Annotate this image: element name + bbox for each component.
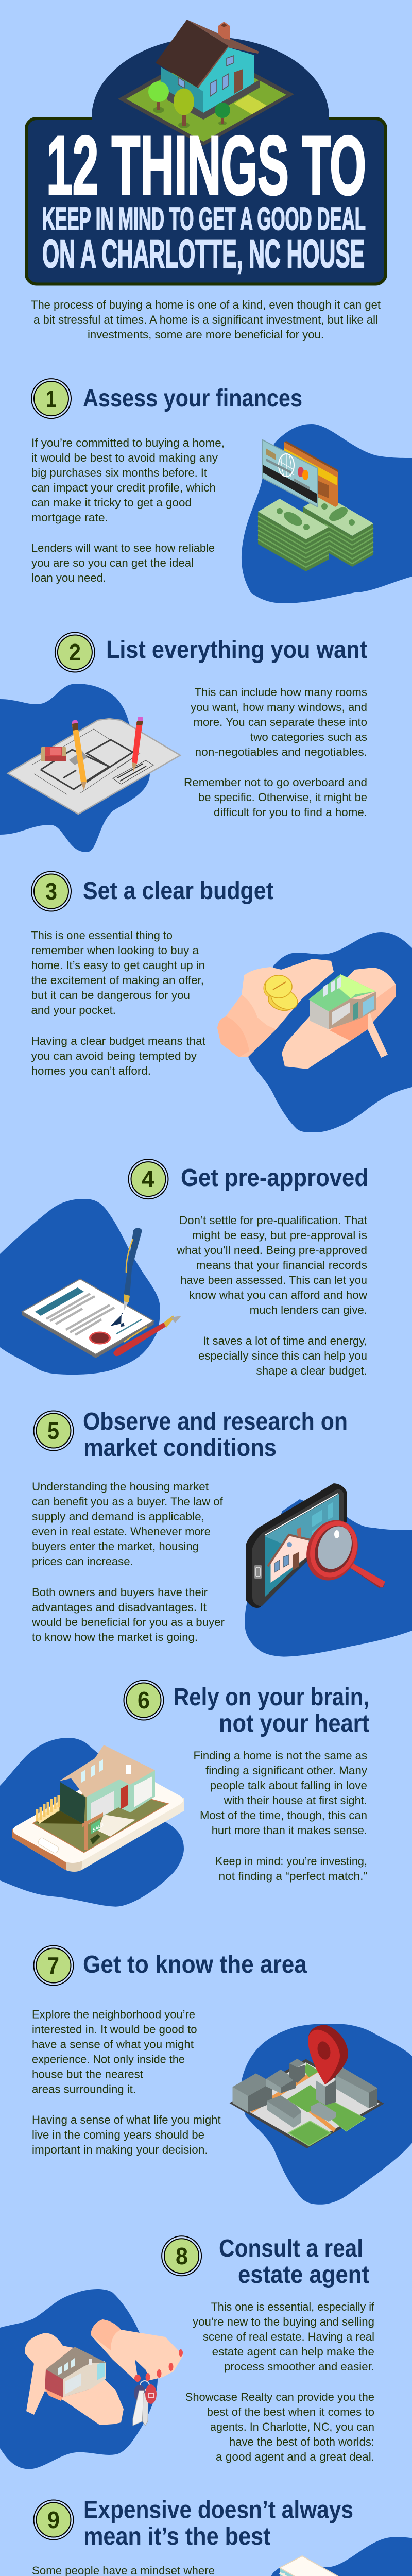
body text: important in making your decision. xyxy=(32,2143,208,2156)
body text: supply and demand is applicable, xyxy=(32,1510,204,1523)
body text: experience. Not only inside the xyxy=(32,2053,185,2066)
header title banner xyxy=(26,20,386,284)
number badge 4: 4 xyxy=(142,1165,154,1192)
body text: process smoother and easier. xyxy=(224,2360,374,2373)
body text: people talk about falling in love xyxy=(210,1779,367,1792)
number badge 2 xyxy=(55,633,95,672)
body text: loan you need. xyxy=(31,571,106,584)
panel: step 6 rely on your brain, not your heart xyxy=(0,1681,369,1907)
body text: Lenders will want to see how reliable xyxy=(31,541,215,554)
body text: interested in. It would be good to xyxy=(32,2023,197,2036)
body text: agents. In Charlotte, NC, you can xyxy=(210,2420,374,2433)
illustration: hands exchanging house and keys xyxy=(0,2289,183,2469)
body text: can benefit you as a buyer. The law of xyxy=(32,1495,223,1508)
body text: Understanding the housing market xyxy=(32,1480,209,1493)
body text: Finding a home is not the same as xyxy=(194,1749,367,1762)
intro text: The process of buying a home is one of a kind, even though it can get xyxy=(31,298,381,311)
heading xyxy=(174,1684,369,1737)
body text: you can avoid being tempted by xyxy=(31,1049,197,1062)
number badge 8 xyxy=(162,2236,201,2276)
number badge 5 xyxy=(34,1411,73,1451)
illustration: blueprint with pencils xyxy=(0,684,180,852)
body text: This can include how many rooms xyxy=(195,686,367,699)
panel: step 7 get to know the area xyxy=(32,1945,412,2205)
number badge 8: 8 xyxy=(176,2243,188,2269)
body text: not finding a “perfect match.” xyxy=(218,1870,367,1883)
panel: step 2 list everything you want xyxy=(0,633,367,852)
body text: shape a clear budget. xyxy=(256,1364,367,1377)
illustration: city map with location pin xyxy=(229,2024,412,2205)
body text xyxy=(176,1214,367,1377)
illustration: credit cards and money xyxy=(242,424,412,603)
body text xyxy=(31,929,205,1077)
body text: This one is essential, especially if xyxy=(211,2300,375,2313)
illustration: hands holding phone with tower blocks xyxy=(224,2537,412,2576)
body text xyxy=(194,1749,367,1883)
intro text: a bit stressful at times. A home is a significant investment, but like all xyxy=(33,313,378,326)
body text: it would be best to avoid making any xyxy=(31,451,218,464)
body text: Explore the neighborhood you’re xyxy=(32,2008,195,2021)
body text: remember when looking to buy a xyxy=(31,944,199,957)
illustration: house on a phone xyxy=(0,1738,184,1907)
body text xyxy=(31,436,225,584)
body text: would be beneficial for you as a buyer xyxy=(31,1616,225,1629)
body text: have the best of both worlds: xyxy=(229,2435,374,2448)
body text: especially since this can help you xyxy=(198,1349,367,1362)
body text: to know how the market is going. xyxy=(32,1631,198,1643)
heading: Get to know the area xyxy=(83,1951,307,1978)
body text: finding a significant other. Many xyxy=(205,1764,367,1777)
heading xyxy=(219,2235,369,2289)
panel: step 1 assess your finances xyxy=(31,379,412,603)
body text: Having a clear budget means that xyxy=(31,1035,205,1047)
body text: two categories such as xyxy=(250,731,367,743)
body text: can make it tricky to get a good xyxy=(31,496,192,509)
number badge 1: 1 xyxy=(46,385,57,412)
illustration: signed document and pens xyxy=(0,1199,181,1375)
body text: much lenders can give. xyxy=(250,1303,367,1316)
number badge 1 xyxy=(31,379,71,418)
heading: Consult a real xyxy=(219,2235,363,2262)
number badge 6: 6 xyxy=(138,1687,150,1714)
body text: might be easy, but pre-approval is xyxy=(192,1229,367,1242)
title heading xyxy=(42,119,366,276)
body text: you are so you can get the ideal xyxy=(31,556,194,569)
heading: Get pre-approved xyxy=(181,1164,368,1192)
body text: If you’re committed to buying a home, xyxy=(31,436,225,449)
body text: best of the best when it comes to xyxy=(207,2405,374,2418)
body text: non-negotiables and negotiables. xyxy=(195,745,367,758)
intro text: investments, some are more beneficial for you. xyxy=(88,328,324,341)
number badge 6 xyxy=(124,1681,164,1720)
body text: more. You can separate these into xyxy=(194,716,367,728)
body text: Both owners and buyers have their xyxy=(32,1586,208,1599)
heading: Observe and research on xyxy=(83,1408,348,1435)
body text: hurt more than it makes sense. xyxy=(212,1824,367,1837)
body text xyxy=(31,1480,225,1643)
body text: know what you can afford and how xyxy=(189,1289,367,1301)
body text: means that your financial records xyxy=(196,1259,367,1272)
body text: homes you can’t afford. xyxy=(31,1064,151,1077)
number badge 7 xyxy=(34,1945,73,1986)
illustration: house on a phone: SALE xyxy=(93,1822,104,1833)
illustration: hands holding coins and house xyxy=(217,932,412,1132)
body text xyxy=(185,2300,375,2463)
heading: Expensive doesn’t always xyxy=(83,2497,353,2523)
number badge 3 xyxy=(31,872,71,911)
body text: estate agent can help make the xyxy=(212,2345,374,2358)
body text: but it can be dangerous for you xyxy=(31,989,190,1002)
panel: step 9 expensive doesn't always mean it's the best xyxy=(31,2497,412,2576)
body text: have been assessed. This can let you xyxy=(180,1274,367,1286)
body text: live in the coming years should be xyxy=(32,2128,204,2141)
body text: Don’t settle for pre-qualification. That xyxy=(179,1214,367,1227)
body text: and your pocket. xyxy=(31,1004,116,1016)
heading: List everything you want xyxy=(106,636,367,664)
body text: house but the nearest xyxy=(32,2068,143,2080)
body text: scene of real estate. Having a real xyxy=(203,2330,374,2343)
body text xyxy=(184,686,367,819)
panel: step 5 observe and research on market conditions xyxy=(31,1408,412,1657)
body text: with their house at first sight. xyxy=(224,1794,367,1807)
heading: Assess your finances xyxy=(83,385,302,412)
heading: Set a clear budget xyxy=(83,877,273,905)
icon: isometric house xyxy=(118,20,294,146)
body text: you’re new to the buying and selling xyxy=(193,2315,374,2328)
number badge 5: 5 xyxy=(47,1417,59,1444)
body text: the excitement of making an offer, xyxy=(31,974,204,987)
body text: Showcase Realty can provide you the xyxy=(185,2391,374,2403)
body text xyxy=(32,2008,221,2156)
body text: buyers enter the market, housing xyxy=(32,1540,199,1553)
body text: even in real estate. Whenever more xyxy=(32,1525,211,1538)
panel: step 3 set a clear budget xyxy=(31,872,412,1132)
number badge 7: 7 xyxy=(47,1952,59,1979)
body text: can impact your credit profile, which xyxy=(31,481,216,494)
body text: have a sense of what you might xyxy=(32,2038,194,2050)
heading: Rely on your brain, xyxy=(174,1684,369,1711)
illustration: tablet with magnifying glass xyxy=(245,1483,412,1657)
number badge 9: 9 xyxy=(47,2506,60,2533)
panel: step 4 get pre-approved xyxy=(0,1159,368,1377)
body text: you want, how many windows, and xyxy=(191,701,367,714)
heading xyxy=(83,1408,348,1462)
body text: It saves a lot of time and energy, xyxy=(203,1334,367,1347)
body text: This is one essential thing to xyxy=(31,929,173,942)
body text: prices can increase. xyxy=(32,1555,133,1568)
number badge 3: 3 xyxy=(45,878,57,905)
body text: areas surrounding it. xyxy=(32,2082,136,2096)
number badge 4 xyxy=(129,1159,168,1199)
heading: mean it’s the best xyxy=(83,2523,271,2550)
heading xyxy=(83,2497,353,2550)
intro text xyxy=(31,298,381,341)
heading: market conditions xyxy=(83,1434,277,1462)
body text: mortgage rate. xyxy=(31,511,108,524)
number badge 9 xyxy=(34,2500,73,2540)
body text: difficult for you to find a home. xyxy=(214,806,367,819)
body text: home. It’s easy to get caught up in xyxy=(31,959,205,972)
body text: be specific. Otherwise, it might be xyxy=(198,791,367,804)
body text: big purchases six months before. It xyxy=(31,466,207,479)
body text: Most of the time, though, this can xyxy=(200,1809,367,1822)
body text: Keep in mind: you’re investing, xyxy=(215,1855,367,1868)
body text: a good agent and a great deal. xyxy=(216,2450,374,2463)
panel: step 8 consult a real estate agent xyxy=(0,2235,375,2469)
heading: estate agent xyxy=(238,2261,369,2289)
body text: advantages and disadvantages. It xyxy=(32,1601,207,1614)
body text: Having a sense of what life you might xyxy=(32,2113,221,2126)
heading: not your heart xyxy=(219,1710,369,1737)
body text: what you’ll need. Being pre-approved xyxy=(176,1244,367,1257)
number badge 2: 2 xyxy=(69,639,81,666)
banner panel xyxy=(26,37,386,284)
body text: Remember not to go overboard and xyxy=(184,776,367,789)
